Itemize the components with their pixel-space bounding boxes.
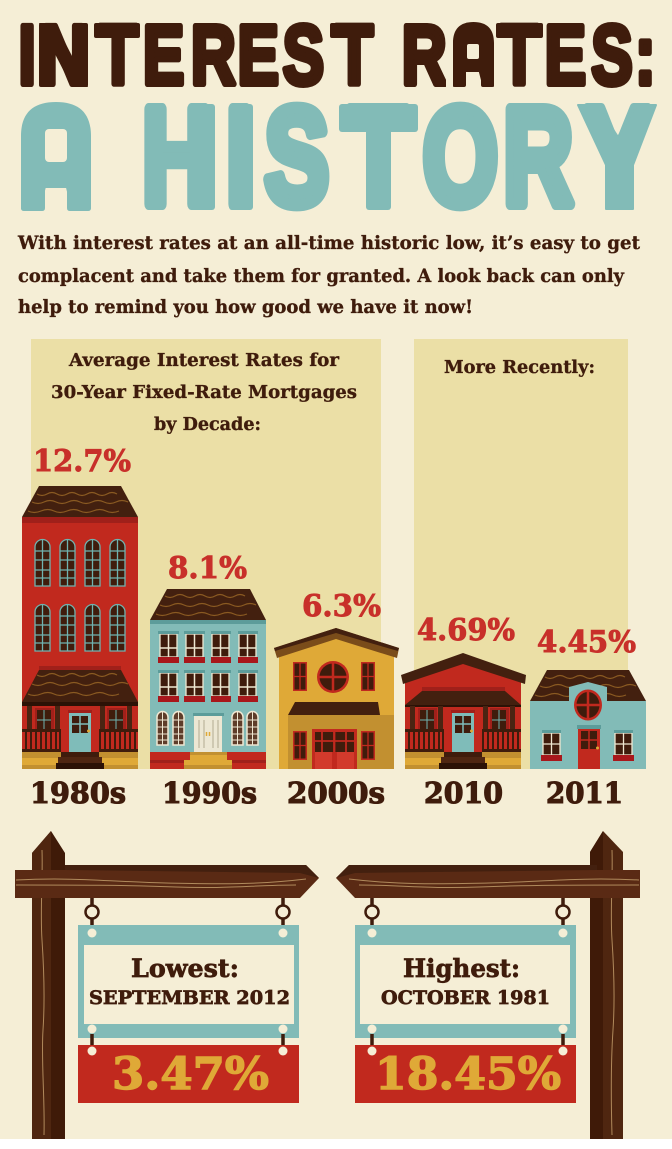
sign: highest xyxy=(355,898,576,1103)
rate labels: 6.3% xyxy=(302,589,381,624)
decade labels: 2011 xyxy=(546,776,623,810)
panel: average by decade: Average Interest Rates for xyxy=(68,351,340,371)
sign: highest: 18.45% xyxy=(375,1049,561,1100)
sign: lowest: Lowest: xyxy=(131,954,239,983)
house: 1990s xyxy=(150,589,266,769)
house: 1980s xyxy=(22,486,138,769)
rate labels xyxy=(33,444,636,660)
sign: highest: Highest: xyxy=(403,954,520,983)
panel: average by decade: by Decade: xyxy=(154,415,261,435)
sign: lowest: SEPTEMBER 2012 xyxy=(89,987,290,1009)
sign: lowest: 3.47% xyxy=(112,1049,269,1100)
intro text: help to remind you how good we have it now! xyxy=(18,297,473,318)
title: A History: A HISTORY xyxy=(21,80,650,234)
house: 2011 xyxy=(530,670,646,769)
rate labels: 8.1% xyxy=(168,551,247,586)
intro text: With interest rates at an all-time historic low, it’s easy to get xyxy=(17,233,640,254)
sign post: left xyxy=(15,831,319,1139)
panel: more recently xyxy=(414,339,628,769)
intro text xyxy=(17,233,640,318)
intro text: complacent and take them for granted. A look back can only xyxy=(18,266,625,287)
rate labels: 4.69% xyxy=(417,613,515,648)
decade labels: 1980s xyxy=(30,776,126,810)
house: 2000s xyxy=(274,628,399,769)
panel: more recently: More Recently: xyxy=(444,358,595,378)
panel: average by decade: 30-Year Fixed-Rate Mortgages xyxy=(51,383,357,403)
decade labels: 2000s xyxy=(287,776,385,810)
rate labels: 12.7% xyxy=(33,444,131,479)
title: Interest Rates: INTEREST RATES: xyxy=(19,8,656,102)
sign post: right xyxy=(336,831,640,1139)
panel: average by decade xyxy=(31,339,381,769)
sign: lowest xyxy=(78,898,299,1103)
sign: highest: OCTOBER 1981 xyxy=(381,987,550,1009)
decade labels: 1990s xyxy=(162,776,257,810)
decade labels: 2010 xyxy=(424,776,503,810)
house: 2010 xyxy=(401,653,526,769)
rate labels: 4.45% xyxy=(537,625,636,660)
decade labels xyxy=(30,776,623,810)
